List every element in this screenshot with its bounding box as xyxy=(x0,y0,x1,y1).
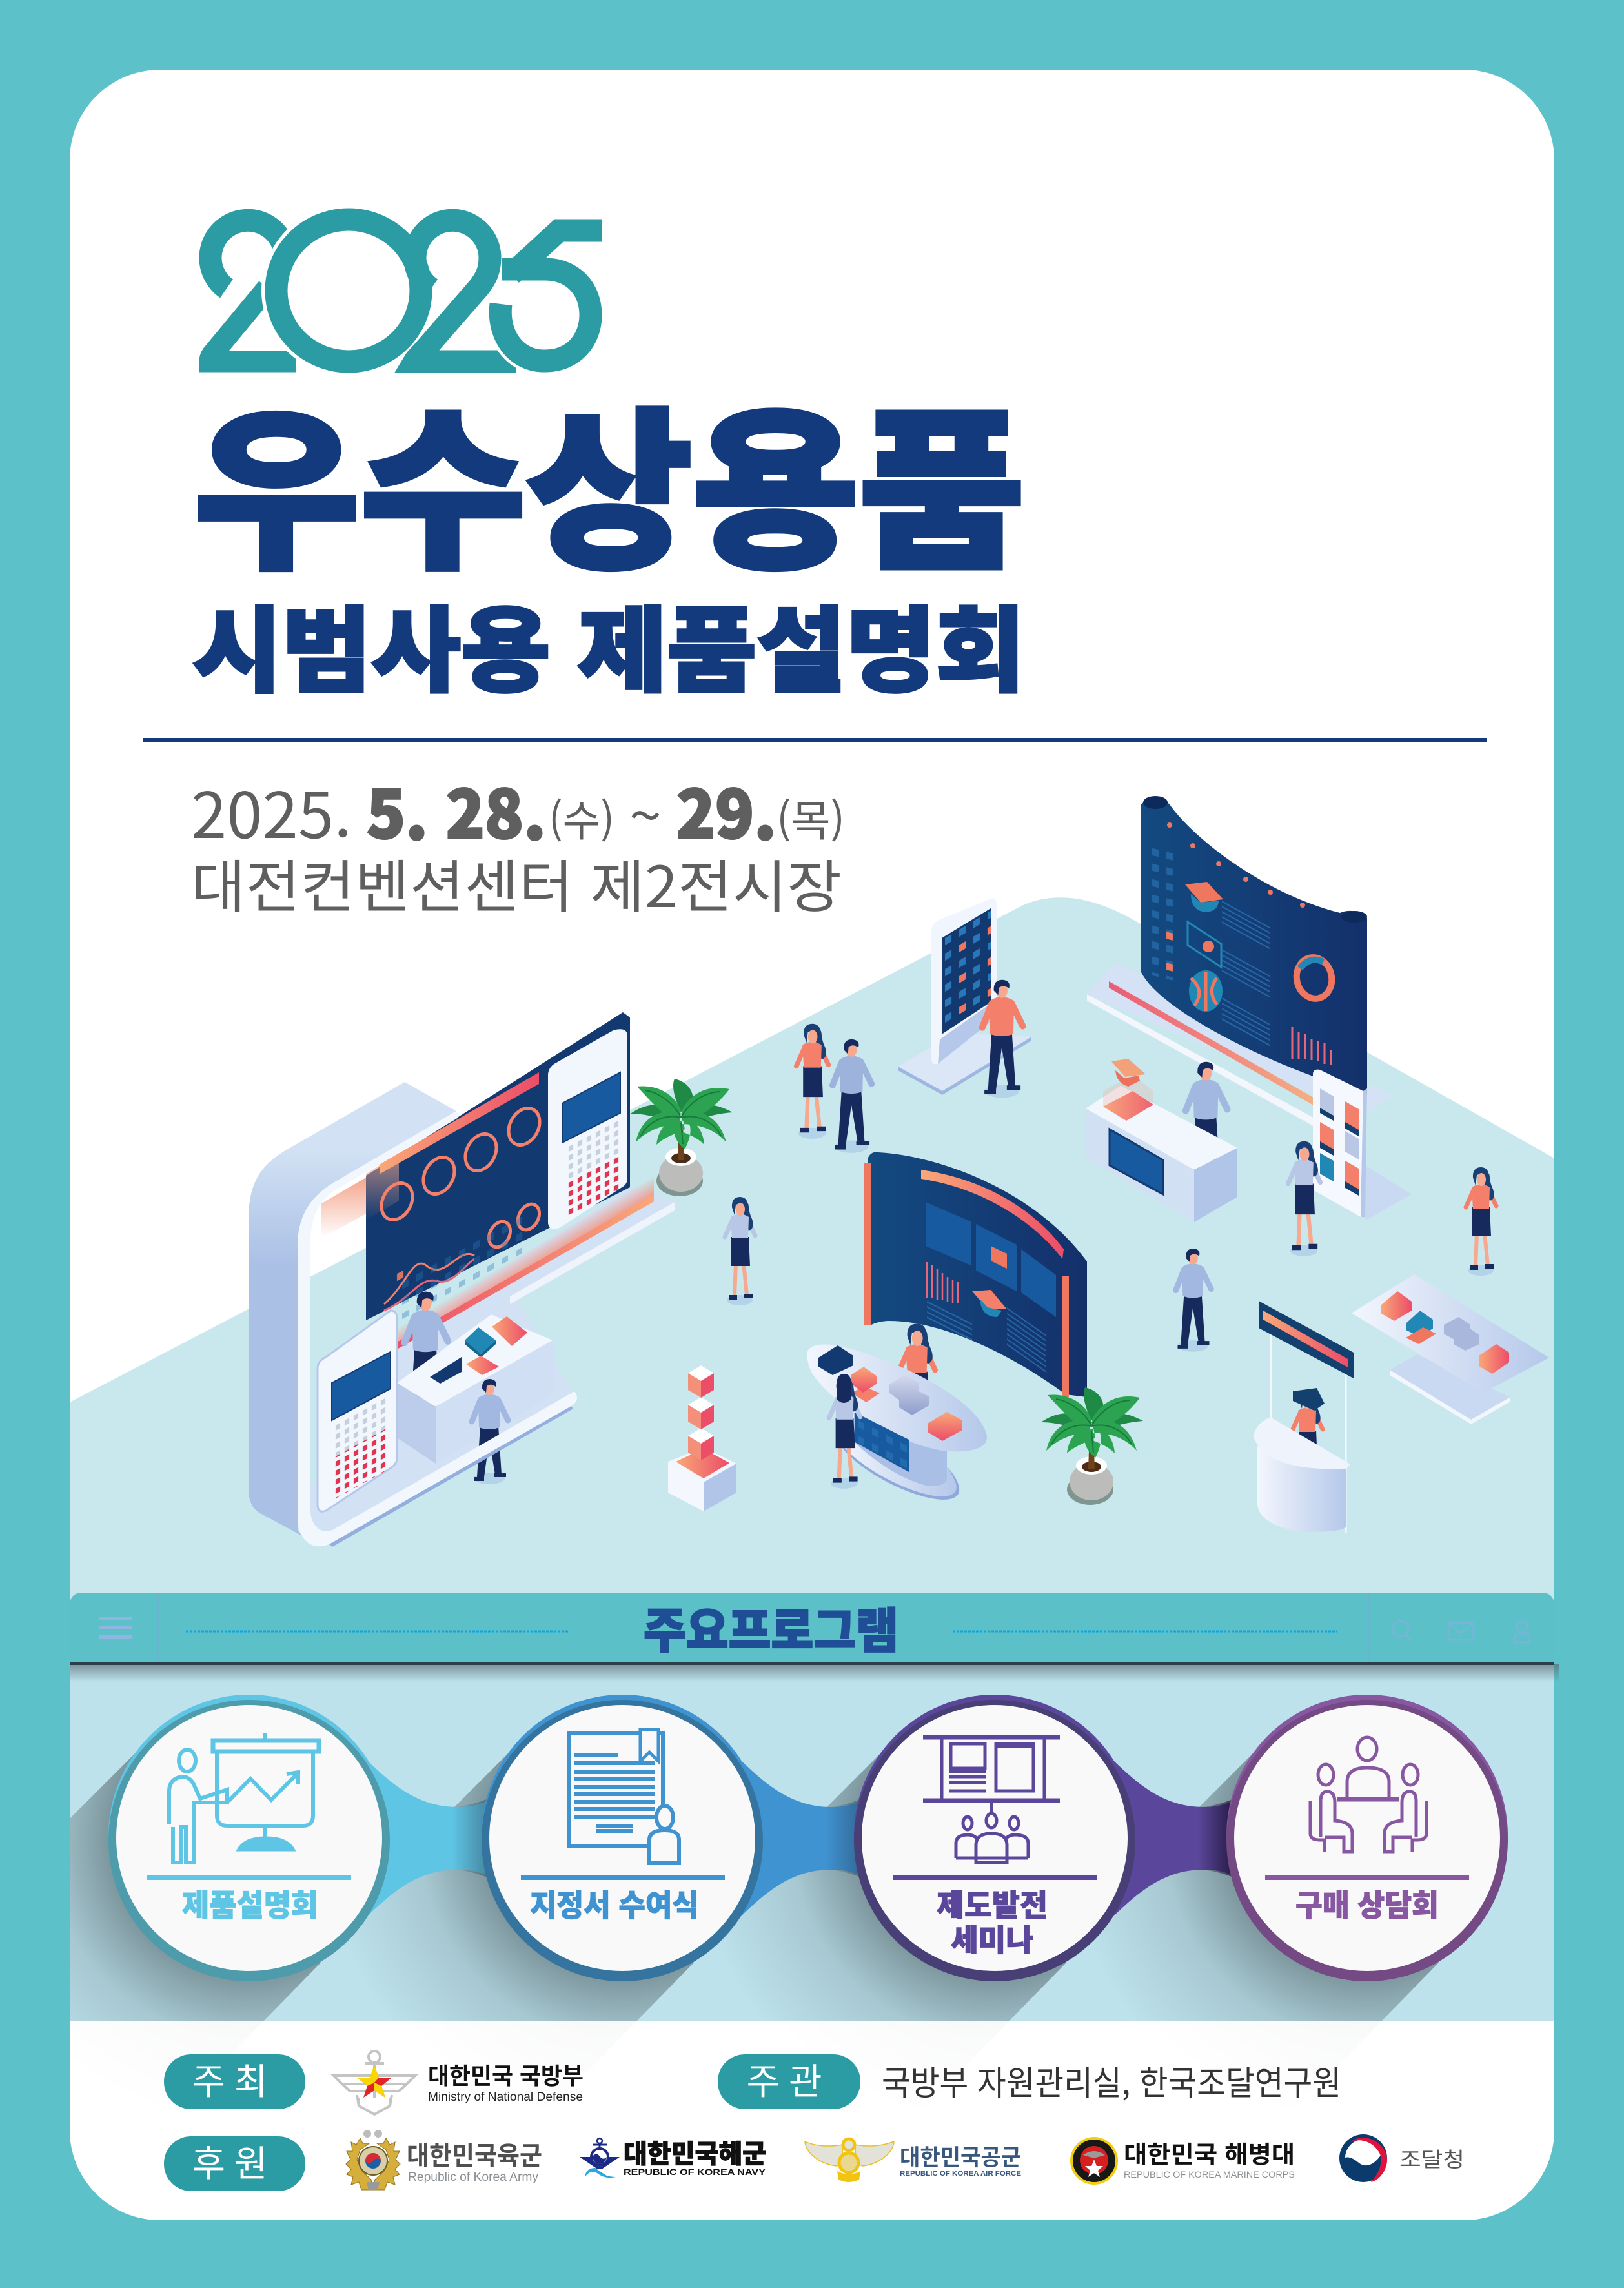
program step: 구매 상담회: 구매 상담회 xyxy=(1295,1881,1439,1925)
logo: Republic of Korea Air Force: REPUBLIC OF KOREA AIR FORCE xyxy=(900,2170,1021,2178)
icon: search xyxy=(1393,1621,1411,1640)
counter with cap hologram xyxy=(1086,1059,1237,1222)
long shadows of program circles xyxy=(70,1753,1439,2021)
logo: Republic of Korea Navy: 대한민국해군 xyxy=(624,2133,766,2171)
logo: Republic of Korea Air Force: 대한민국공군 xyxy=(900,2140,1021,2172)
program step: 제품설명회 xyxy=(108,1695,390,1981)
logo: Public Procurement Service: 조달청 xyxy=(1399,2143,1465,2173)
program step: 지정서 수여식: 지정서 수여식 xyxy=(530,1881,699,1925)
logo: Ministry of National Defense: 대한민국 국방부 xyxy=(428,2058,584,2091)
emblem: taegeuk xyxy=(1339,2134,1387,2182)
person touching kiosk xyxy=(982,980,1022,1098)
program header bar xyxy=(70,1593,1559,1682)
emblem: marine seal xyxy=(1070,2137,1118,2185)
icon: presenter with chart board xyxy=(169,1733,319,1863)
logo: Republic of Korea Navy: REPUBLIC OF KOREA NAVY xyxy=(624,2167,766,2177)
touch kiosk xyxy=(898,898,1031,1095)
white footer band xyxy=(70,2021,1554,2220)
footer: host pill xyxy=(164,2053,305,2109)
date line: 5. 28. xyxy=(367,762,546,857)
booth arch white front xyxy=(298,1111,577,1546)
woman walking near booth xyxy=(725,1197,755,1305)
date line: 2025. xyxy=(191,765,352,857)
booth glow xyxy=(321,1178,366,1238)
logo: Republic of Korea Marine Corps: REPUBLIC OF KOREA MARINE CORPS xyxy=(1124,2169,1295,2180)
icon: user xyxy=(1514,1622,1530,1642)
program step: 제도발전 세미나: 세미나 xyxy=(951,1915,1033,1960)
icon: mail xyxy=(1448,1623,1473,1640)
organizer names: 국방부 자원관리실, 한국조달연구원 xyxy=(882,2056,1341,2105)
booth coral light strip xyxy=(397,1172,654,1349)
date line: (수) xyxy=(549,787,614,849)
curved banner top right xyxy=(1087,796,1392,1135)
logo: Ministry of National Defense xyxy=(334,2051,584,2114)
year logo 2025 xyxy=(210,220,602,362)
icon: certificate with person xyxy=(569,1730,679,1863)
floor xyxy=(70,897,1554,1601)
oval table xyxy=(807,1323,987,1500)
booth main screen xyxy=(366,1012,630,1320)
woman at oval table xyxy=(829,1374,860,1489)
icon: seminar screen with audience xyxy=(923,1737,1060,1863)
title sub: 시범사용 제품설명회 xyxy=(192,577,1025,711)
couple talking xyxy=(797,1024,871,1153)
footer: organizer pill: 주관 xyxy=(746,2053,831,2105)
program section band xyxy=(70,1664,1554,2021)
emblem: navy anchor xyxy=(580,2138,620,2178)
program step: 제도발전 세미나: 제도발전 xyxy=(937,1881,1048,1925)
logo: Republic of Korea Army: 대한민국육군 xyxy=(407,2135,542,2172)
curved banner center xyxy=(864,1152,1087,1397)
logo: Ministry of National Defense: Ministry of National Defense xyxy=(428,2090,583,2104)
program step: 제도발전 세미나 xyxy=(854,1695,1135,1981)
date line: 29. xyxy=(676,762,776,857)
booth arch side xyxy=(249,1082,456,1536)
woman walking right xyxy=(1466,1167,1496,1276)
header title: 주요프로그램 xyxy=(644,1593,898,1662)
main booth xyxy=(249,1012,675,1547)
booth customer xyxy=(472,1379,508,1484)
divider rule xyxy=(143,738,1487,742)
cube stack xyxy=(668,1365,736,1511)
tall tile panel xyxy=(1313,1070,1412,1220)
footer: host pill: 주최 xyxy=(192,2053,277,2105)
logo: Republic of Korea Army: Republic of Korea Army xyxy=(408,2171,539,2184)
booth base plate xyxy=(310,1188,675,1533)
logo: Republic of Korea Marine Corps: 대한민국 해병대 xyxy=(1124,2135,1295,2170)
program connectors xyxy=(303,1711,1246,1966)
footer: sponsor pill: 후원 xyxy=(192,2135,277,2187)
booth right panel xyxy=(548,1029,627,1229)
plant near centre xyxy=(1041,1387,1143,1505)
title main: 우수상용품 xyxy=(194,353,1025,603)
program step: 지정서 수여식 xyxy=(482,1695,763,1981)
booth clerk xyxy=(405,1292,448,1418)
logo: Republic of Korea Army xyxy=(346,2130,542,2190)
right display table xyxy=(1352,1274,1549,1424)
logo: Republic of Korea Air Force xyxy=(805,2139,1021,2182)
icon: menu xyxy=(99,1619,132,1637)
logo: Republic of Korea Marine Corps xyxy=(1070,2135,1295,2185)
reception desk with banner xyxy=(1254,1301,1354,1533)
logo: Public Procurement Service xyxy=(1339,2134,1465,2182)
man walking center xyxy=(1176,1249,1211,1352)
footer: organizer pill xyxy=(718,2053,860,2109)
woman at panel xyxy=(1288,1141,1320,1256)
booth left panel xyxy=(318,1311,397,1511)
emblem: army wreath xyxy=(346,2130,400,2190)
date line: (목) xyxy=(776,787,845,849)
emblem: MND anchor and star xyxy=(334,2051,415,2114)
plant near booth xyxy=(631,1079,733,1196)
program step: 구매 상담회 xyxy=(1226,1695,1508,1981)
program step: 제품설명회: 제품설명회 xyxy=(182,1881,318,1925)
emblem: air force wings xyxy=(805,2139,894,2182)
booth counter xyxy=(397,1314,553,1407)
venue line: 대전컨벤션센터 제2전시장 xyxy=(191,842,842,924)
date line: ~ xyxy=(629,774,662,852)
icon: meeting table xyxy=(1310,1737,1426,1852)
logo: Republic of Korea Navy xyxy=(580,2133,766,2178)
illustration: exhibition hall xyxy=(70,796,1554,1601)
date line xyxy=(191,762,845,857)
footer: sponsor pill xyxy=(164,2135,305,2191)
